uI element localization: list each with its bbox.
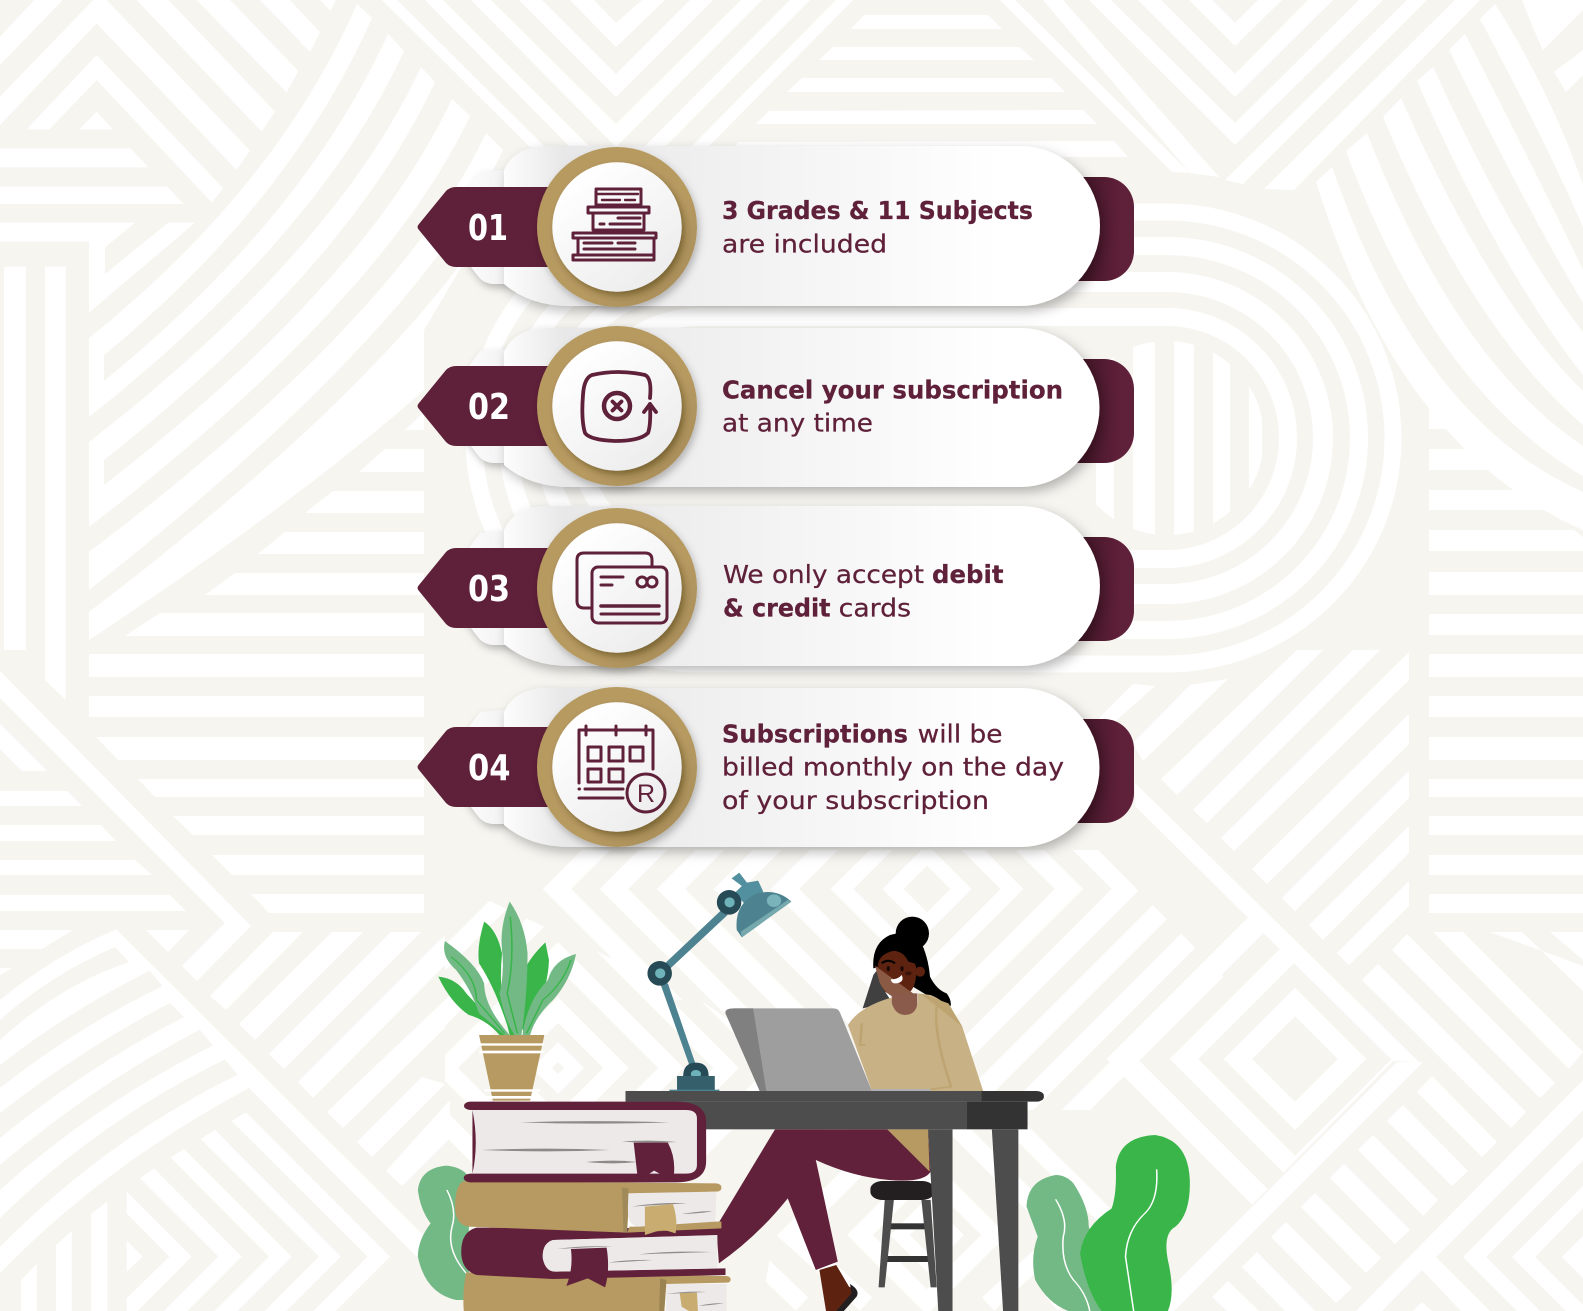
text 1: 3 Grades & 11 Subjects	[722, 196, 1033, 225]
gold ring 4	[537, 687, 697, 847]
text 1	[722, 196, 1033, 258]
step card 1	[418, 146, 1134, 307]
icon: cancel subscription	[582, 372, 656, 441]
trousers	[716, 1129, 931, 1270]
text 4	[722, 719, 1064, 815]
text 3	[723, 560, 1004, 623]
shoe	[836, 1284, 858, 1311]
right tab 4	[1050, 719, 1134, 823]
desk	[626, 1091, 1044, 1311]
text 3: debit	[932, 560, 1004, 589]
stool	[870, 1181, 937, 1287]
icon: credit cards	[577, 553, 667, 623]
skirt of sweater	[887, 1129, 930, 1172]
pill panel 4	[504, 688, 1099, 847]
gold ring 3	[537, 508, 697, 668]
laptop	[725, 1008, 872, 1091]
icon: calendar with registered mark: R	[637, 780, 655, 808]
number tag 4: 04	[468, 748, 510, 789]
number tag 1	[418, 187, 570, 267]
right tab 3	[1050, 537, 1134, 641]
pill panel 2	[504, 328, 1099, 487]
icon: stack of books	[573, 189, 656, 260]
under layer 1	[440, 170, 700, 284]
text 2: Cancel your subscription	[722, 376, 1063, 405]
illustration: student at desk	[418, 873, 1190, 1311]
step card 2	[418, 326, 1134, 487]
right tab 2	[1050, 359, 1134, 463]
under layer 3	[440, 531, 700, 645]
text 3: cards	[839, 594, 911, 623]
person head and hair	[863, 917, 951, 1015]
gold ring 2	[537, 326, 697, 486]
text 2	[722, 376, 1063, 438]
pile of books	[455, 1102, 731, 1311]
number tag 4	[418, 727, 570, 807]
number tag 2	[418, 366, 570, 446]
text 2: at any time	[722, 409, 873, 438]
lamp	[647, 873, 791, 1091]
text 4: billed monthly on the day	[722, 753, 1064, 782]
potted plant	[438, 902, 576, 1101]
pill panel 1	[504, 146, 1100, 306]
number tag 1: 01	[468, 208, 508, 249]
step card 3	[418, 506, 1134, 668]
pill panel 3	[504, 506, 1100, 666]
text 4: of your subscription	[722, 786, 989, 815]
number tag 2: 02	[468, 387, 510, 428]
step card 4	[418, 687, 1134, 847]
under layer 4	[440, 710, 700, 824]
under layer 2	[440, 349, 700, 463]
icon: calendar with registered mark	[579, 726, 665, 812]
right tab 1	[1050, 177, 1134, 281]
sweater	[848, 993, 983, 1091]
text 3: & credit	[723, 594, 831, 623]
number tag 3	[418, 548, 570, 628]
number tag 3: 03	[468, 569, 510, 610]
foot	[819, 1265, 857, 1311]
text 4: Subscriptions	[722, 719, 908, 748]
leaves behind	[418, 1135, 1190, 1311]
gold ring 1	[537, 147, 697, 307]
text 4: will be	[918, 719, 1002, 748]
text 1: are included	[722, 230, 887, 258]
text 3: We only accept	[723, 560, 924, 589]
